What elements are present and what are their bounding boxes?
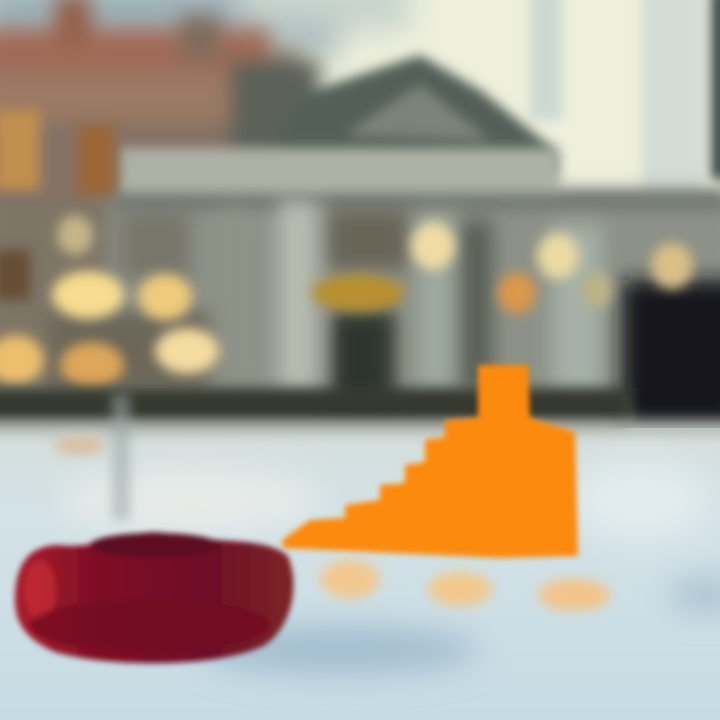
warm window lights (0, 215, 693, 388)
ground shadows (60, 460, 720, 674)
tall white columns at right (530, 0, 720, 200)
ground (0, 428, 720, 720)
sky (0, 0, 720, 260)
dark right building (622, 280, 720, 425)
entablature (115, 148, 720, 212)
red bowl (15, 532, 294, 663)
brick windows (0, 110, 114, 300)
columns and dark bays (50, 200, 602, 405)
pediment roof (275, 55, 555, 175)
building facade (0, 0, 720, 410)
dark base band (0, 388, 720, 434)
thin pole (54, 395, 130, 520)
orange stepped chart (282, 365, 610, 611)
chart feet labels (320, 560, 610, 611)
